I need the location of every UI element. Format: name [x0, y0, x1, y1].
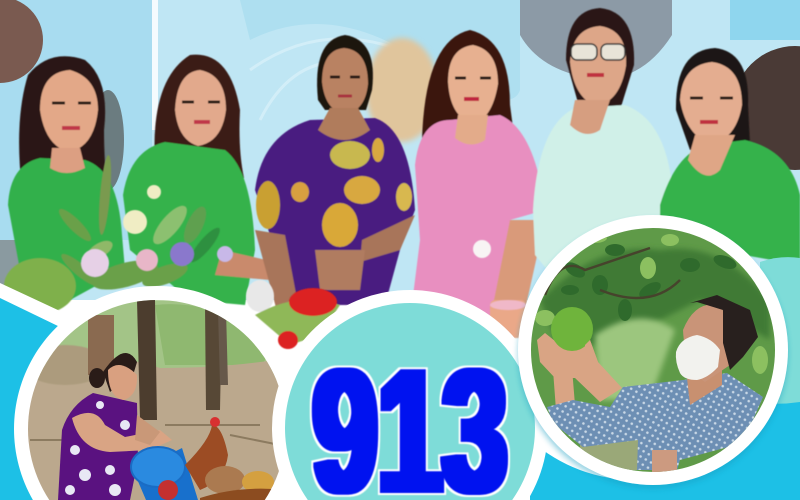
right circle: farmer with pomelo: [518, 215, 788, 489]
face mask: [676, 335, 720, 380]
women group: [8, 8, 800, 320]
banner circle: top left: [0, 0, 43, 83]
pomelo: [551, 307, 593, 351]
table items: [246, 240, 526, 349]
cyan corner panel: [0, 298, 70, 500]
left circle: farmer feeding chickens: [14, 286, 300, 500]
white diagonal strip: [0, 283, 75, 500]
hands: [537, 333, 622, 402]
ground: [28, 357, 286, 500]
woman 3: [255, 35, 415, 315]
bottom decoration: [0, 257, 800, 500]
leaves: [55, 155, 224, 295]
flower bouquet: [4, 155, 233, 314]
pink flowers: [81, 249, 109, 277]
head: [683, 305, 729, 370]
centre circle: number badge: [272, 290, 548, 500]
banner circle: right: [733, 46, 800, 170]
cyan bottom panel: [530, 400, 800, 500]
soft shadow: [518, 219, 788, 489]
woman 2: [123, 55, 275, 305]
left wrist: [554, 376, 575, 405]
white flowers: [123, 210, 147, 234]
ground twigs: [30, 425, 280, 445]
blue bucket: [134, 448, 198, 500]
thumb: [585, 340, 598, 362]
coconut: [4, 258, 76, 314]
white ring: [518, 215, 788, 485]
banner poster: top centre: [520, 0, 672, 79]
red flowers: [289, 288, 337, 316]
banner hand shape: [366, 38, 438, 142]
snack jar: [490, 300, 526, 338]
woman 5: [533, 8, 672, 285]
white flower on pink dress: [473, 240, 491, 258]
farmer: [58, 353, 172, 500]
orchard backdrop: [28, 300, 287, 380]
foliage: [531, 228, 775, 472]
teal disc: [285, 303, 535, 500]
woman 6: [660, 48, 800, 265]
hair: [690, 295, 758, 370]
group photo background: [0, 0, 800, 300]
tree trunks: [88, 315, 114, 375]
chickens: [185, 425, 228, 490]
banner circle: left behind woman: [92, 90, 124, 190]
teal blob: right: [760, 257, 800, 404]
woman 4: [410, 30, 545, 320]
purple flowers: [170, 242, 194, 266]
white ring: [272, 290, 548, 500]
neck: [687, 370, 722, 405]
green bananas: [255, 299, 340, 345]
white ring: [14, 286, 300, 500]
patterned shirt: [547, 373, 763, 470]
ground: [580, 440, 640, 470]
woman 1: [8, 56, 125, 300]
helmet: [246, 280, 274, 312]
